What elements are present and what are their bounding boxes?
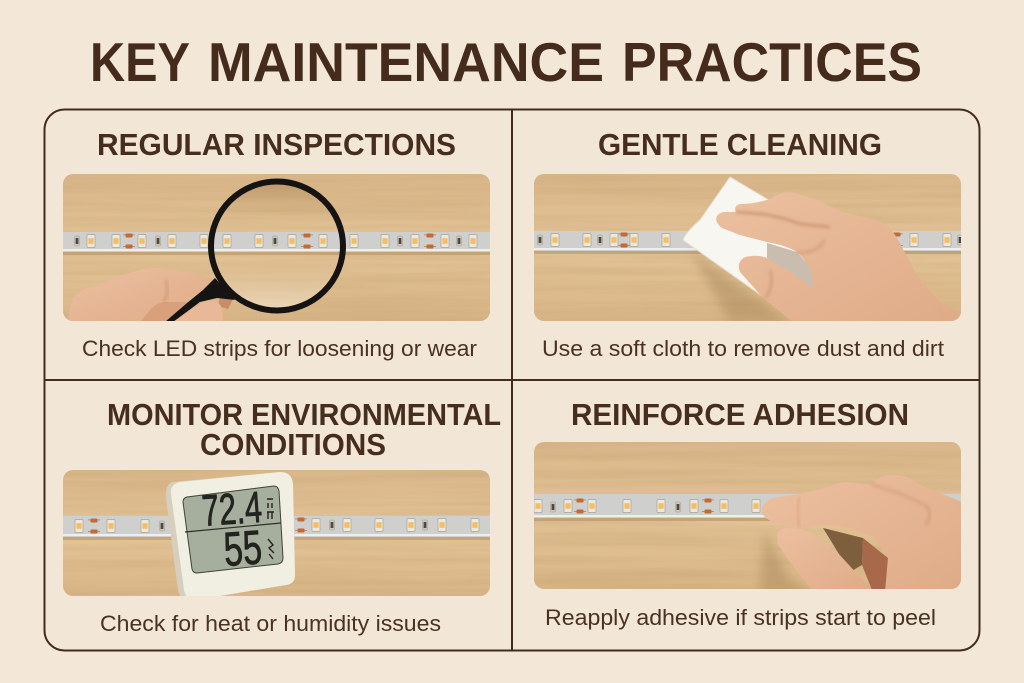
panel: outer frame with dividers	[44, 110, 980, 650]
heading: gentle cleaning: GENTLE CLEANING	[598, 128, 882, 162]
heading: monitor environmental conditions: MONITOR ENVIRONMENTAL	[107, 398, 501, 432]
panel: reinforce adhesion	[534, 398, 962, 630]
illustration: thermometer hygrometer on strip	[63, 470, 490, 600]
heading: monitor environmental conditions	[107, 398, 501, 462]
caption: reinforce adhesion: Reapply adhesive if strips start to peel	[545, 605, 936, 630]
heading: regular inspections: REGULAR INSPECTIONS	[97, 128, 456, 162]
panel: monitor environmental conditions	[63, 398, 501, 636]
caption: regular inspections: Check LED strips for loosening or wear	[82, 336, 478, 361]
title: MAINTENANCE	[208, 31, 604, 93]
illustration: finger pressing strip down	[534, 442, 962, 592]
title: KEY	[90, 31, 190, 93]
heading: monitor environmental conditions: CONDITIONS	[200, 428, 386, 462]
illustration: hand wiping strip with cloth	[534, 174, 962, 322]
humidity reading: 55	[222, 521, 264, 577]
panel: regular inspections	[63, 128, 490, 361]
title: PRACTICES	[622, 31, 922, 93]
illustration: magnifier over LED strip	[63, 174, 490, 322]
title	[90, 31, 922, 93]
heading: reinforce adhesion: REINFORCE ADHESION	[571, 398, 909, 432]
panel: gentle cleaning	[534, 128, 962, 361]
caption: monitor environmental conditions: Check for heat or humidity issues	[100, 611, 441, 636]
temperature reading: 72.4	[200, 483, 264, 536]
caption: gentle cleaning: Use a soft cloth to remove dust and dirt	[542, 336, 945, 361]
